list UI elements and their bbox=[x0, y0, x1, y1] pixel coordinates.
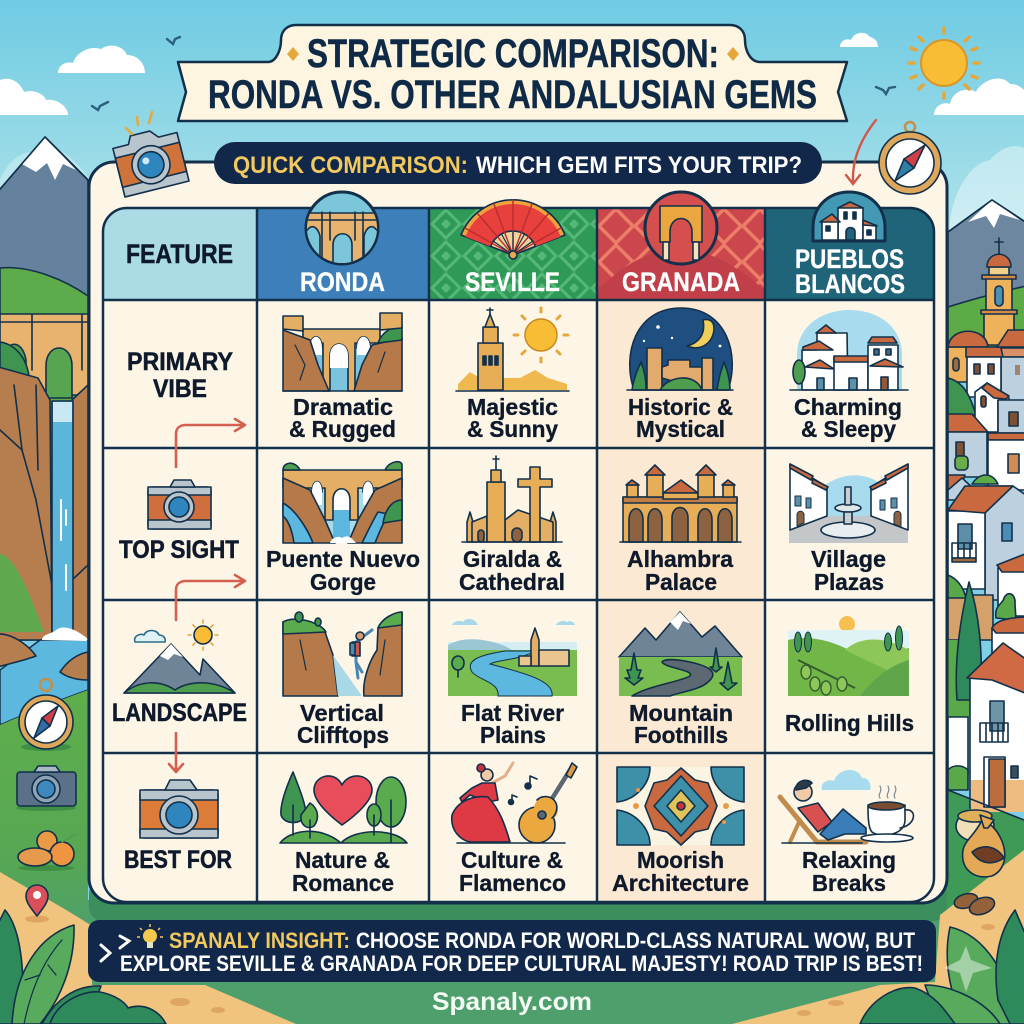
cell text: & Rugged bbox=[289, 416, 396, 442]
watermark sparkle bbox=[944, 946, 992, 992]
row label: primary vibe: PRIMARY bbox=[127, 348, 233, 376]
bush bbox=[0, 342, 29, 376]
cell text: Historic & bbox=[628, 394, 733, 420]
cell text: Majestic bbox=[467, 394, 558, 420]
cell text: Mystical bbox=[636, 416, 725, 442]
left canyon cliffs bbox=[0, 366, 88, 640]
cell text: Puente Nuevo bbox=[266, 546, 420, 572]
cell text: Clifftops bbox=[297, 722, 389, 748]
icon: Moorish tile bbox=[617, 767, 744, 845]
cell text bbox=[461, 700, 564, 748]
subtitle question: WHICH GEM FITS YOUR TRIP? bbox=[476, 152, 802, 179]
coffee beans bbox=[953, 891, 997, 918]
cell text: Charming bbox=[794, 394, 902, 420]
cell: Seville landscape bbox=[448, 619, 577, 748]
cell: Ronda primary vibe bbox=[283, 313, 402, 442]
column label: BLANCOS bbox=[795, 269, 905, 299]
icon: climber on cliffs bbox=[283, 612, 402, 696]
cell text bbox=[467, 394, 558, 442]
panel: comparison card bbox=[89, 162, 947, 903]
cell text bbox=[459, 847, 566, 896]
cell: Ronda landscape bbox=[283, 612, 402, 748]
icon: grey camera bbox=[16, 766, 76, 811]
camera sparkle marks bbox=[126, 112, 152, 134]
right big house bbox=[948, 643, 1024, 820]
row label: landscape bbox=[112, 620, 247, 727]
cell text bbox=[628, 394, 733, 442]
cell text: Mountain bbox=[629, 700, 733, 726]
right sand path bbox=[732, 850, 1024, 1024]
icon: river plain and town bbox=[448, 619, 577, 696]
icon: camera bbox=[140, 780, 218, 838]
arrow: top sight to Ronda bbox=[176, 419, 245, 467]
column: Seville header bbox=[461, 200, 565, 297]
cell: Pueblos primary vibe bbox=[790, 310, 908, 442]
icon: Ronda bridge badge bbox=[304, 192, 380, 264]
icon: castle under night sky bbox=[627, 308, 733, 390]
cell text: Rolling Hills bbox=[785, 710, 914, 736]
cell text: Plazas bbox=[814, 569, 884, 595]
column label: SEVILLE bbox=[465, 267, 560, 297]
cell: Granada landscape bbox=[619, 612, 742, 748]
footer brand: Spanaly.com bbox=[432, 988, 592, 1016]
left lower meadow bbox=[0, 690, 88, 930]
cell text bbox=[266, 546, 420, 595]
right meadow bbox=[947, 790, 1024, 925]
cell: Granada top sight bbox=[620, 465, 741, 595]
icon: bridge in canyon bbox=[283, 313, 402, 391]
cell text bbox=[289, 394, 396, 442]
cell text: Cathedral bbox=[459, 569, 565, 595]
icon: Moorish arch badge bbox=[645, 192, 717, 264]
cell text bbox=[811, 546, 886, 595]
cell: Seville top sight bbox=[459, 456, 565, 595]
heading: feature: FEATURE bbox=[126, 239, 233, 269]
icon: top-right compass bbox=[879, 122, 941, 194]
arrow: landscape to Ronda bbox=[176, 575, 245, 620]
left side decorations bbox=[16, 679, 76, 922]
cell: Seville best for bbox=[452, 763, 577, 896]
table header backgrounds bbox=[103, 208, 934, 902]
icon: rolling hills and olives bbox=[788, 616, 909, 696]
comparison table bbox=[103, 192, 934, 902]
column: Pueblos Blancos header bbox=[795, 192, 905, 299]
column label: RONDA bbox=[300, 267, 385, 297]
right village bbox=[948, 238, 1024, 790]
cell text bbox=[627, 546, 734, 595]
insight line 2: EXPLORE SEVILLE & GRANADA FOR DEEP CULTURAL MAJESTY! ROAD TRIP IS BEST! bbox=[120, 951, 923, 976]
icon: white village bbox=[790, 310, 908, 390]
cell text: Breaks bbox=[812, 870, 886, 896]
cell text: Foothills bbox=[634, 722, 728, 748]
arrow: landscape to best for bbox=[169, 733, 183, 772]
left bridge bbox=[0, 314, 88, 398]
cell text: & Sunny bbox=[467, 416, 558, 442]
cell text: Plains bbox=[480, 722, 546, 748]
cell text: Alhambra bbox=[627, 546, 734, 572]
cell text: Architecture bbox=[612, 870, 749, 896]
column: Ronda header bbox=[300, 192, 385, 297]
shaded ground under card bbox=[89, 880, 948, 921]
column: Granada header bbox=[622, 192, 740, 297]
cell text bbox=[612, 847, 749, 896]
arrow: banner to Pueblos Blancos bbox=[846, 120, 876, 184]
icon: relaxing with coffee bbox=[780, 770, 913, 843]
cell text bbox=[802, 847, 896, 896]
title line 1: STRATEGIC COMPARISON: bbox=[307, 32, 719, 76]
subtitle pill bbox=[214, 142, 822, 184]
sun bbox=[909, 28, 979, 98]
waterfall bbox=[52, 401, 73, 636]
row label: primary vibe: VIBE bbox=[153, 375, 207, 403]
cell text: Village bbox=[811, 546, 886, 572]
cell text: Giralda & bbox=[463, 546, 562, 572]
icon: flamenco dancer and guitar bbox=[452, 763, 577, 843]
sky clouds bbox=[0, 33, 1024, 240]
cell text: Flamenco bbox=[459, 870, 566, 896]
left sand path bbox=[0, 872, 296, 1024]
insight bar bbox=[88, 920, 936, 982]
bottom-right foliage bbox=[860, 910, 1024, 1024]
cell text: Relaxing bbox=[802, 847, 896, 873]
cell: Ronda best for bbox=[280, 772, 407, 896]
river rocks bbox=[0, 634, 88, 680]
table grid bbox=[103, 208, 934, 902]
cell text bbox=[292, 847, 394, 896]
icon: Puente Nuevo gorge bbox=[283, 462, 402, 543]
insight line 1 highlight: SPANALY INSIGHT: bbox=[169, 928, 350, 953]
cell text bbox=[629, 700, 733, 748]
cell text: & Sleepy bbox=[801, 416, 896, 442]
bottom-left foliage bbox=[0, 910, 166, 1024]
icon: village plaza fountain bbox=[789, 464, 908, 543]
row text: TOP SIGHT bbox=[119, 536, 239, 564]
icon: lightbulb bbox=[137, 924, 163, 948]
chevrons bbox=[101, 936, 129, 961]
row label: best for bbox=[124, 780, 232, 874]
cell text: Culture & bbox=[461, 847, 563, 873]
cell text: Palace bbox=[645, 569, 717, 595]
icon: map pin bbox=[25, 885, 49, 922]
cell text: Nature & bbox=[295, 847, 390, 873]
row label: primary vibe bbox=[127, 348, 233, 403]
title banner bbox=[178, 25, 847, 121]
icon: oranges and almonds bbox=[18, 831, 76, 871]
cell text bbox=[459, 546, 565, 595]
cell: Pueblos landscape bbox=[785, 616, 914, 736]
cell text: Gorge bbox=[310, 569, 376, 595]
icon: compass bbox=[19, 679, 73, 751]
cell text: Vertical bbox=[300, 700, 384, 726]
cell text: Romance bbox=[292, 870, 394, 896]
row label: top sight bbox=[119, 480, 239, 564]
right side spice bag bbox=[956, 810, 1005, 877]
column label bbox=[795, 244, 905, 299]
falls foam bbox=[42, 628, 87, 641]
insight line 1: CHOOSE RONDA FOR WORLD-CLASS NATURAL WOW, BUT bbox=[356, 928, 915, 953]
icon: camera bbox=[148, 480, 211, 529]
subtitle highlight: QUICK COMPARISON: bbox=[233, 152, 468, 179]
left mountain bbox=[0, 137, 88, 300]
birds bbox=[92, 37, 895, 110]
icon: Alhambra palace bbox=[620, 465, 741, 542]
sand pebbles bbox=[170, 924, 995, 1016]
cell: Pueblos best for bbox=[780, 770, 913, 896]
icon: red fan bbox=[461, 200, 565, 259]
column label: PUEBLOS bbox=[795, 244, 904, 274]
left hill bbox=[0, 268, 88, 640]
icon: mountains, sun, cloud bbox=[124, 620, 235, 693]
icon: top-left camera bbox=[111, 125, 189, 197]
cell text bbox=[794, 394, 902, 442]
cell text: Moorish bbox=[637, 847, 724, 873]
row text: LANDSCAPE bbox=[112, 699, 247, 727]
cell text bbox=[297, 700, 389, 748]
cell: Ronda top sight bbox=[266, 462, 420, 595]
column label: GRANADA bbox=[622, 267, 740, 297]
title line 2: RONDA VS. OTHER ANDALUSIAN GEMS bbox=[208, 73, 817, 117]
cell: Granada best for bbox=[612, 767, 749, 896]
cell: Pueblos top sight bbox=[789, 464, 908, 595]
bottom ground bbox=[0, 900, 1024, 1024]
right mountain bbox=[948, 200, 1024, 330]
cell text: Flat River bbox=[461, 700, 564, 726]
icon: Giralda and cathedral cross bbox=[462, 456, 562, 542]
icon: heart and trees bbox=[280, 772, 407, 843]
icon: mountain road bbox=[619, 612, 742, 696]
row text: BEST FOR bbox=[124, 846, 232, 874]
icon: white village badge bbox=[813, 192, 885, 241]
cell: Granada primary vibe bbox=[627, 308, 733, 442]
icon: Giralda tower with sun bbox=[456, 308, 569, 391]
river bbox=[0, 640, 88, 725]
cell: Seville primary vibe bbox=[456, 308, 569, 442]
cell text: Dramatic bbox=[293, 394, 393, 420]
banner ornaments bbox=[287, 47, 739, 61]
